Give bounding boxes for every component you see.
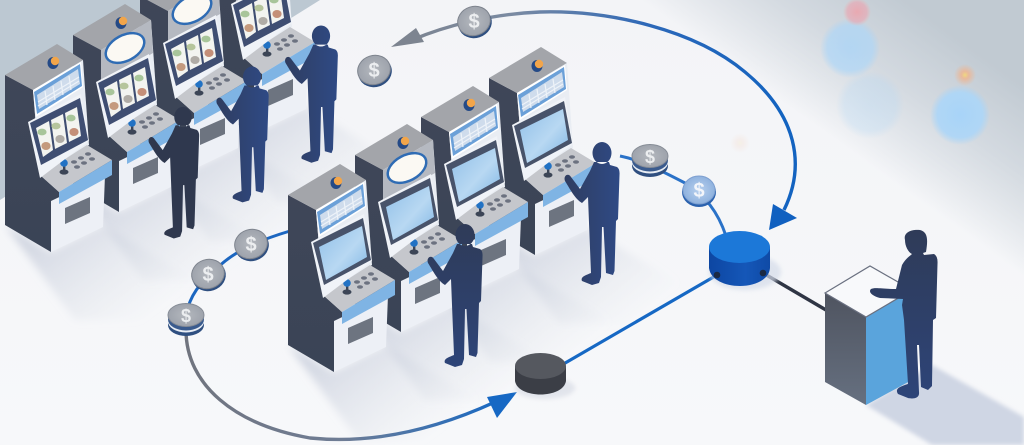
back row of slot machines (5, 0, 315, 252)
coin: blue near hub (682, 176, 716, 207)
front row of slot machines (288, 47, 596, 372)
player 2 (216, 67, 269, 202)
player right (565, 142, 620, 285)
machine: back 1 (5, 44, 112, 252)
machine: front 2 (355, 124, 462, 332)
players: back row (149, 25, 338, 238)
player left (428, 224, 483, 367)
machine: back 4 (208, 0, 315, 134)
hub: blue cylinder (709, 231, 781, 290)
machine: front 3 (421, 86, 528, 294)
players: front row (428, 142, 620, 367)
coin stack (168, 304, 204, 336)
machine: front 4 (489, 47, 596, 255)
coin: flying top (454, 2, 496, 43)
player 3 (285, 25, 338, 163)
connector: coins to hub (620, 156, 726, 236)
coin: blue near hub: $ (693, 180, 705, 202)
connector: coins rising to back row (186, 231, 290, 315)
coins on left path (168, 225, 273, 336)
coin stack: near hub (632, 144, 668, 177)
machine: back 3 (140, 0, 247, 173)
arrow: return arc from hub to coins (top) (391, 12, 797, 230)
coin: flying left (354, 51, 396, 92)
sensor: dark cylinder (515, 353, 575, 399)
coin (231, 225, 273, 266)
coin (188, 255, 230, 296)
podium (825, 266, 912, 405)
podium shadow (866, 365, 1024, 445)
connector: hub to podium (763, 273, 826, 310)
arrow: coin path to dark sensor (bottom) (186, 330, 517, 439)
operator silhouette (870, 230, 938, 398)
player 1 (149, 107, 199, 238)
machine: front 1 (288, 164, 395, 372)
connector: hub to dark sensor (560, 275, 717, 366)
machine: back 2 (73, 4, 180, 212)
machine floor shadows (5, 107, 679, 440)
